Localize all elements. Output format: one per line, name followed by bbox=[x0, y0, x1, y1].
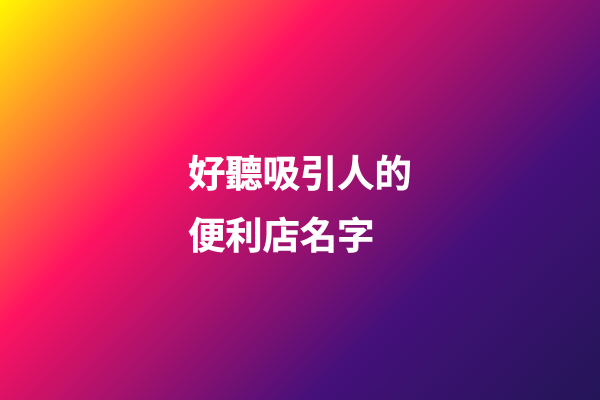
title bbox=[188, 153, 412, 257]
title: 好聽吸引人的 bbox=[188, 153, 412, 195]
title: 便利店名字 bbox=[188, 215, 374, 257]
